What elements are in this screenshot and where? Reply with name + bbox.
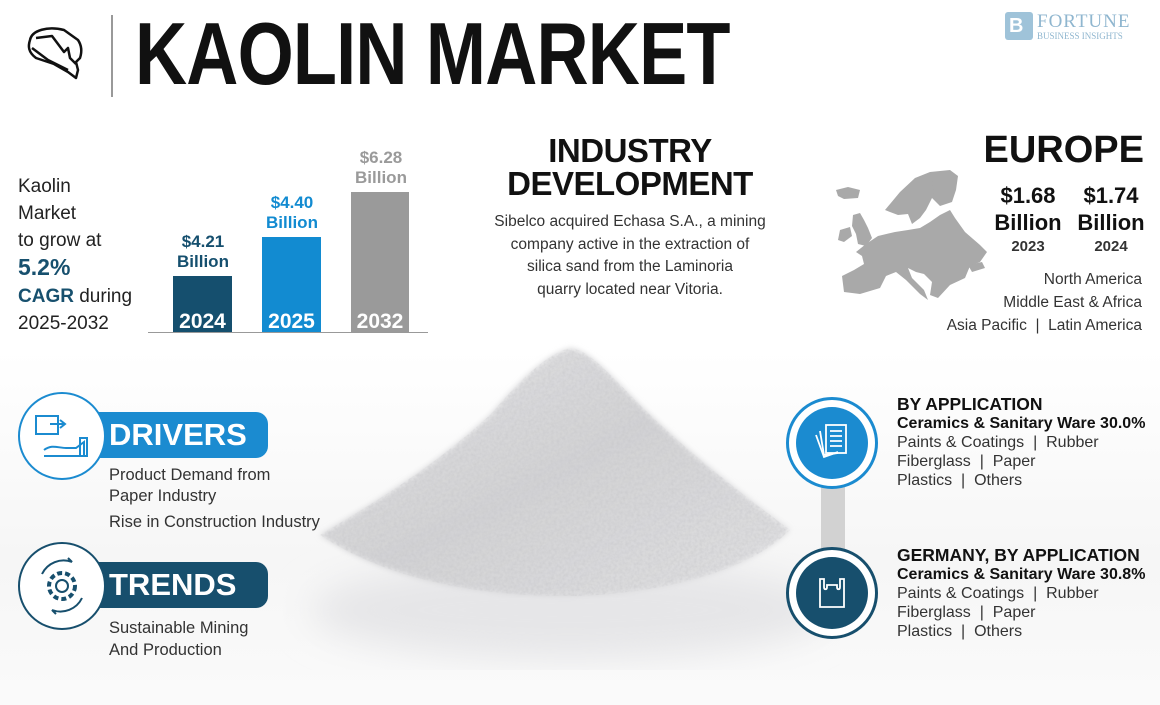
by application: Ceramics & Sanitary Ware 30.0% <box>897 415 1145 432</box>
text: 2024 <box>1094 238 1128 255</box>
trends: And Production <box>109 641 222 659</box>
icon: kaolin header <box>28 27 82 80</box>
text: CAGR <box>18 176 132 334</box>
text: $1.74 <box>1083 183 1139 208</box>
industry development <box>494 132 766 298</box>
other regions <box>946 271 1142 334</box>
bar chart: Billion <box>266 213 318 232</box>
logo: FORTUNE <box>1037 11 1130 32</box>
kaolin powder pile <box>320 346 806 662</box>
other regions: North America <box>1044 271 1142 288</box>
logo <box>1005 11 1130 41</box>
bar chart: $4.21 <box>182 232 224 251</box>
connector <box>821 475 845 560</box>
drivers: Paper Industry <box>109 487 216 505</box>
germany by application: Fiberglass | Paper <box>897 604 1035 621</box>
logo: BUSINESS INSIGHTS <box>1037 31 1123 41</box>
bar chart: $6.28 <box>360 148 402 167</box>
europe values: 2023 <box>1011 238 1045 255</box>
bar chart: $4.40 <box>271 193 313 212</box>
germany by application: Plastics | Others <box>897 623 1022 640</box>
bar chart: Billion <box>355 168 407 187</box>
europe values <box>994 183 1062 255</box>
by application <box>897 394 1146 489</box>
europe values: $1.68 <box>1000 183 1056 208</box>
trends: TRENDS <box>109 567 236 602</box>
trends <box>18 542 268 659</box>
industry development: company active in the extraction of <box>511 236 749 252</box>
industry development: quarry located near Vitoria. <box>537 280 723 298</box>
other regions: Asia Pacific | Latin America <box>947 317 1142 334</box>
text: CAGR: 2025-2032 <box>18 313 109 334</box>
germany by application: Ceramics & Sanitary Ware 30.8% <box>897 566 1145 583</box>
map: europe <box>836 170 987 300</box>
by application: Plastics | Others <box>897 472 1022 489</box>
europe values: Billion <box>994 210 1062 235</box>
trends: Sustainable Mining <box>109 619 248 637</box>
text: CAGR: CAGR during <box>18 286 132 307</box>
bar chart: Billion <box>177 252 229 271</box>
europe heading: EUROPE <box>984 129 1144 171</box>
icon: application <box>786 397 878 489</box>
by application: Paints & Coatings | Rubber <box>897 434 1099 451</box>
germany by application <box>897 545 1146 640</box>
text: CAGR: Kaolin <box>18 176 71 197</box>
drivers: Rise in Construction Industry <box>109 513 320 531</box>
title: KAOLIN MARKET <box>135 4 730 103</box>
drivers: Product Demand from <box>109 466 270 484</box>
by application: Fiberglass | Paper <box>897 453 1035 470</box>
text: Billion <box>1077 210 1145 235</box>
by application: BY APPLICATION <box>897 394 1043 414</box>
drivers: DRIVERS <box>109 417 247 452</box>
industry development: INDUSTRY <box>548 132 712 169</box>
industry development: DEVELOPMENT <box>507 165 753 202</box>
text: CAGR: Market <box>18 203 76 224</box>
germany by application: GERMANY, BY APPLICATION <box>897 545 1140 565</box>
germany by application: Paints & Coatings | Rubber <box>897 585 1099 602</box>
other regions: Middle East & Africa <box>1003 294 1142 311</box>
industry development: Sibelco acquired Echasa S.A., a mining <box>494 213 766 230</box>
icon: drivers <box>18 392 106 480</box>
drivers pill <box>95 412 268 458</box>
bar chart <box>148 148 428 333</box>
drivers <box>18 392 320 531</box>
icon: trends <box>18 542 106 630</box>
text: CAGR: to grow at <box>18 230 101 251</box>
text: CAGR: 5.2% <box>18 254 70 280</box>
bar chart: 2024 <box>179 310 226 333</box>
industry development: silica sand from the Laminoria <box>527 258 733 275</box>
bar chart: 2032 <box>357 310 403 333</box>
bar chart: 2025 <box>268 310 315 333</box>
icon: germany application <box>786 547 878 639</box>
logo: B <box>1009 15 1023 37</box>
trends pill <box>95 562 268 608</box>
